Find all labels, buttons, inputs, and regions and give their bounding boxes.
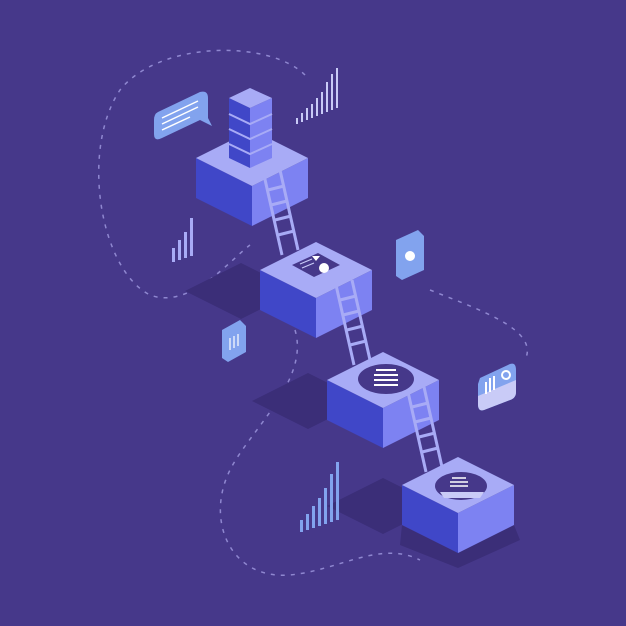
box 1 <box>196 130 308 226</box>
icon: bar chart top <box>296 68 338 124</box>
icon: document gear <box>396 230 424 280</box>
dashed path <box>99 50 527 575</box>
icon: bar chart bottom <box>300 462 339 532</box>
icon: chart card <box>478 364 516 410</box>
icon: bar chart left <box>172 218 193 262</box>
server stack <box>229 88 272 168</box>
icon: document left <box>222 320 246 362</box>
ladders <box>264 170 442 472</box>
box 2 <box>260 242 372 338</box>
box 4 <box>402 457 514 553</box>
shadows <box>185 263 520 568</box>
box 3 <box>327 352 439 448</box>
icon: chat bubble <box>154 92 212 139</box>
